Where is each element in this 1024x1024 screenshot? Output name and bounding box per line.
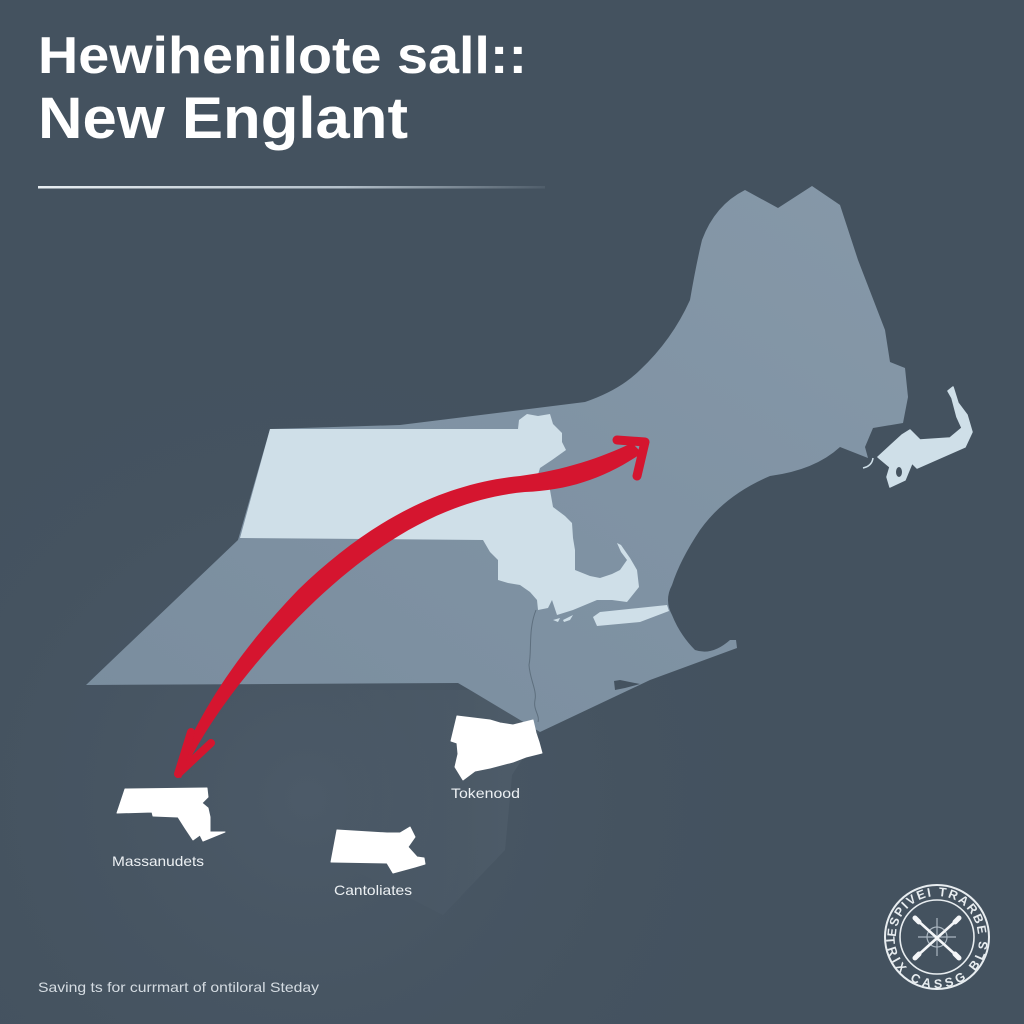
title: New Englant <box>38 86 408 151</box>
region: small islands <box>553 615 573 622</box>
state: Tokenood <box>451 716 542 801</box>
seal emblem <box>884 884 990 990</box>
state: Cantoliates <box>331 827 425 898</box>
faint offshore shape <box>330 690 540 915</box>
region: mainland <box>86 186 908 732</box>
state: Massachusetts <box>112 788 225 869</box>
title <box>38 27 527 151</box>
label: Cantoliates <box>334 882 412 898</box>
title divider <box>38 186 545 188</box>
red arrow <box>175 440 645 778</box>
seal text <box>886 887 988 988</box>
crossed paddles <box>915 918 959 958</box>
title: Hewihenilote sall:: <box>38 27 527 85</box>
label: Massanudets <box>112 853 204 869</box>
map of New England <box>86 186 972 732</box>
cape islet <box>863 458 873 468</box>
inlet <box>614 680 640 690</box>
seal text: TRIX CASSG BLS <box>886 936 988 988</box>
label: Tokenood <box>451 785 520 801</box>
region: light island <box>593 605 669 626</box>
region: light state <box>240 414 639 615</box>
cape hole <box>896 467 902 477</box>
river <box>529 610 538 722</box>
compass <box>918 918 956 956</box>
seal text: ESPIVEI TRARBE <box>887 887 986 936</box>
region: cape <box>878 387 972 487</box>
footer note: Saving ts for currmart of ontiloral Steday <box>38 979 319 995</box>
